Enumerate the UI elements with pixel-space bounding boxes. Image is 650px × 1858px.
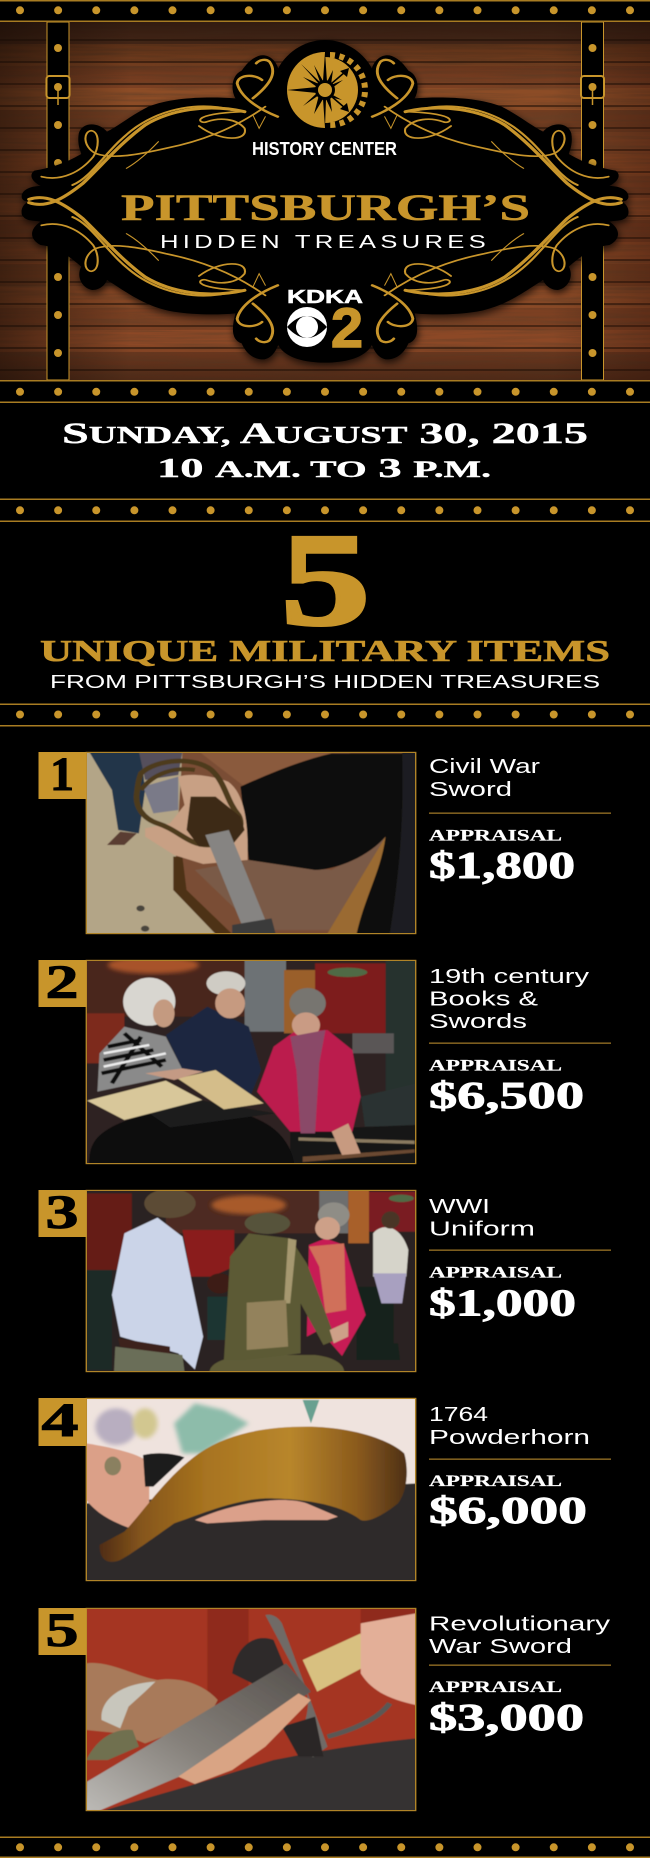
item 4 text — [429, 1403, 611, 1532]
number badge 2 — [38, 956, 86, 1009]
item 5 text: War Sword — [429, 1635, 572, 1658]
item 4 text: 1764 — [429, 1403, 488, 1426]
item 1 text: $1,800 — [429, 845, 575, 887]
item 4 text: Powderhorn — [429, 1426, 590, 1449]
item 4 text: $6,000 — [429, 1490, 587, 1532]
item 1 text: Sword — [429, 778, 512, 801]
studded band: top — [0, 0, 650, 22]
date and time: 10 A.M. TO 3 P.M. — [157, 453, 491, 483]
gold flourishes — [29, 60, 621, 342]
title: Pittsburgh's: PITTSBURGH’S — [121, 188, 530, 229]
item 1 text: Civil War — [429, 755, 540, 778]
item 3 text: WWI — [429, 1195, 490, 1218]
subtitle: Hidden Treasures: HIDDEN TREASURES — [160, 232, 490, 252]
studded band: below header — [0, 380, 650, 403]
left strap with buckle — [46, 22, 70, 380]
item 3: photo of WWI uniform — [86, 1189, 416, 1373]
number badge 1 — [38, 748, 86, 801]
number badge 2: 2 — [46, 956, 78, 1009]
item 1 text — [429, 755, 611, 887]
item 4 text: APPRAISAL — [429, 1473, 562, 1490]
logo: KDKA CBS 2: KDKA — [287, 286, 363, 307]
logo: KDKA CBS 2: 2 — [331, 296, 363, 359]
item 5: photo of revolutionary war sword — [86, 1608, 416, 1812]
item 2 text — [429, 965, 611, 1117]
number badge 3 — [38, 1186, 86, 1239]
heading: unique military items: UNIQUE MILITARY ITEMS — [40, 634, 610, 668]
number badge 4 — [38, 1394, 86, 1447]
item 5 text: Revolutionary — [429, 1612, 611, 1636]
item 3 text: $1,000 — [429, 1282, 576, 1324]
item 5 text: APPRAISAL — [429, 1679, 562, 1696]
studded band: below date — [0, 498, 650, 522]
item 2 text: Swords — [429, 1010, 527, 1033]
subheading: FROM PITTSBURGH’S HIDDEN TREASURES — [50, 672, 600, 692]
item 2: photo of books and swords — [86, 956, 416, 1165]
item 5 text: $3,000 — [429, 1697, 584, 1739]
number badge 4: 4 — [42, 1394, 78, 1447]
logo: KDKA CBS 2 — [287, 286, 363, 359]
icon: compass and gear logo — [287, 52, 365, 128]
item 3 text: APPRAISAL — [429, 1264, 562, 1282]
item 5 text — [429, 1612, 611, 1739]
right strap with buckle — [581, 22, 604, 380]
studded band: bottom — [0, 1836, 650, 1858]
big number 5: 5 — [281, 506, 370, 653]
item 4: photo of powderhorn — [86, 1398, 416, 1583]
item 2 text: $6,500 — [429, 1075, 584, 1117]
logo text: History Center: HISTORY CENTER — [252, 139, 397, 159]
item 1: photo of civil war sword — [86, 752, 416, 935]
number badge 1: 1 — [50, 748, 74, 801]
date and time: S UNDAY, A UGUST 30, 2015 — [62, 417, 588, 450]
date and time — [62, 417, 588, 483]
number badge 3: 3 — [46, 1186, 78, 1239]
item 2 text: Books & — [429, 988, 538, 1010]
studded band: below heading — [0, 704, 650, 726]
number badge 5 — [38, 1604, 86, 1657]
black medallion — [22, 40, 629, 363]
item 2 text: 19th century — [429, 965, 590, 988]
item 1 text: APPRAISAL — [429, 828, 562, 844]
panel: wood header — [0, 22, 650, 380]
number badge 5: 5 — [46, 1604, 78, 1657]
item 3 text — [429, 1195, 611, 1324]
item 3 text: Uniform — [429, 1218, 535, 1240]
item 2 text: APPRAISAL — [429, 1058, 562, 1074]
